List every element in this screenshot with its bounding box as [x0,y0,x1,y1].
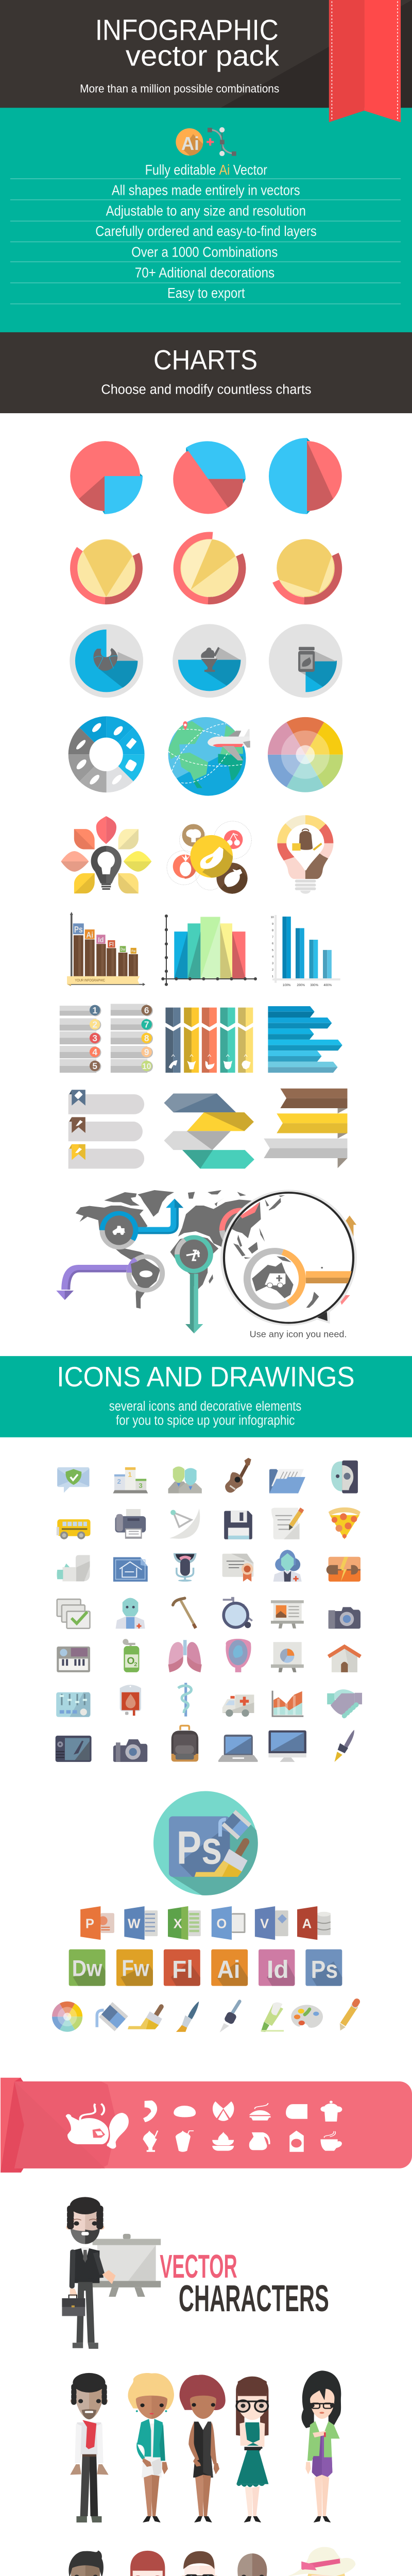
icon: technical pen [220,2002,239,2032]
panel: Photoshop badge: Ps [177,1822,222,1874]
icon: paint can [97,2002,128,2031]
bar chart with numbered axes: 6 [272,942,273,945]
icon: oxygen bottle: O [127,1655,135,1667]
numbered list left: 4 [92,1047,97,1057]
icon: Outlook [212,1906,246,1940]
character 5: woman in green jacket [302,2370,341,2522]
character 6: bearded man in vest [66,2550,111,2576]
flower with lightbulb [61,816,151,893]
icon: small colour wheel [52,2002,82,2032]
icon: podium [113,1467,148,1493]
icon: approved windows [57,1599,90,1629]
bar chart with numbered axes: 200% [297,984,305,987]
icon: lungs [168,1640,202,1672]
icon: Flash [164,1950,200,1986]
presentation board [93,2234,161,2297]
bar chart with numbered axes: 1 [272,975,273,978]
icon: handshake [327,1689,362,1716]
numbered list right: 6 [144,1005,149,1015]
icon: Word [124,1906,158,1940]
decorative arrows behind magnifier [338,1215,356,1305]
bar chart with numbered axes: 10 [270,916,274,919]
feature list: All shapes made entirely in vectors [112,182,300,198]
bar chart with numbered axes: 2 [272,969,273,972]
icon: Dreamweaver [69,1950,106,1986]
bar chart with numbered axes [270,915,340,987]
panel: world map with magnifier [56,1190,357,1333]
icon: satellite dish [169,1509,200,1539]
feature list: Carefully ordered and easy-to-find layers [95,223,317,239]
ribbon bookmark [329,0,401,122]
icon: Illustrator [211,1950,248,1986]
numbered list left: 1 [92,1005,97,1015]
bar chart with numbered axes: 3 [272,962,273,965]
icon: female doctor [273,1550,302,1582]
icon: PowerPoint: P [85,1917,94,1931]
icon: certificate [222,1554,253,1582]
title: INFOGRAPHIC [95,14,279,46]
numbered list right: 8 [144,1033,149,1043]
magnifier callout [220,1190,357,1326]
bar chart with numbered axes: 8 [272,929,273,933]
pie chart 3 [269,438,342,514]
food icon row one [143,2100,342,2122]
icon: Fireworks: Fw [122,1955,149,1981]
numbered list right [111,1004,153,1073]
heading: charts: CHARTS [153,345,258,376]
bar chart with Adobe icons: Dw [121,947,125,952]
bar chart with Adobe icons: Ps [74,924,83,935]
icon: laptop [218,1735,258,1762]
gauge chart: ice cream [173,624,246,698]
feature list: 70+ Aditional decorations [135,264,274,280]
icon: ambulance [222,1694,254,1717]
icon: baby in womb [226,1639,251,1672]
character: presenter [62,2197,115,2349]
pie chart 2 [173,441,246,514]
icon: InDesign [259,1950,295,1986]
pills with bookmarks [68,1090,144,1168]
feature list: Easy to export [167,285,245,301]
panel: infographic components [60,811,347,1168]
feature list: Fully editable Ai Vector [145,162,267,178]
bar chart with numbered axes: 9 [272,923,273,926]
pie chart 1 [70,441,143,514]
panel: icon rows and software logos [52,1639,362,2032]
bar chart with Adobe icons: YOUR INFOGRAPHIC [75,978,105,982]
icon: Dreamweaver: Dw [72,1955,102,1981]
subtitle: More than a million possible combinations [80,82,279,95]
icon: synthesizer [57,1647,90,1672]
icon: Visio: V [260,1917,269,1931]
icon: Flash: Fl [172,1956,193,1984]
numbered list right: 7 [144,1019,149,1029]
vertical tabs with animal icons [165,1008,253,1073]
panel: icons heading: ICONS AND DRAWINGS [57,1361,355,1393]
bar chart with numbered axes: 400% [323,984,332,987]
panel: food banner [1,2078,412,2349]
bar chart with numbered axes: 100% [283,984,291,987]
icon: Photoshop [305,1950,342,1986]
icon: Fireworks [116,1950,153,1986]
north america ring and arrow [102,1199,183,1247]
panel: Photoshop badge [153,1791,258,1895]
globe with plane [168,717,250,796]
column chart on dotted axis [161,914,257,986]
character 10: woman in sun hat [288,2547,355,2576]
icon: blueprint [113,1557,148,1582]
panel: header and features [0,0,412,413]
icon: podium: 3 [139,1482,143,1489]
icon: document and pencil [271,1508,302,1539]
icon: school bus [57,1519,91,1539]
numbered list right: 9 [144,1047,149,1057]
icon: camera small [113,1739,147,1762]
africa ring and arrow [177,1238,211,1333]
icon: monitor [268,1731,306,1762]
lightbulb ring chart [277,815,334,894]
icon: flat brush [128,2007,162,2029]
icon: podium: 2 [117,1478,121,1485]
world map [76,1190,261,1309]
icon: guitar [225,1458,251,1493]
donut chart 1 [74,539,139,601]
character 1: scarf [70,2373,109,2522]
numbered list left: 2 [92,1019,97,1029]
colour wheel [268,717,343,792]
icon: PowerPoint [80,1906,114,1940]
numbered list right: 10 [142,1062,151,1071]
icon: palette [291,2005,323,2028]
character 3: woman in black dress [179,2375,226,2522]
icon: Photoshop: Ps [311,1956,338,1984]
bar chart with numbered axes: 5 [272,949,273,952]
icon: pizza slice [329,1507,360,1539]
panel: food banner: VECTOR [160,2248,237,2285]
panel: round charts [68,438,343,796]
icon: rod of asclepius [178,1683,191,1717]
icon: Illustrator: Ai [217,1956,240,1984]
icon: doctors [168,1466,202,1493]
caption: Use any icon you need. [250,1329,347,1339]
panel: vector characters [66,2370,355,2576]
icon: audio mixer [56,1692,91,1717]
icon: InDesign: Id [267,1956,289,1984]
donut chart 2 [177,536,242,601]
bar chart with Adobe icons: Fw [131,948,135,953]
panel: icons heading: for you to spice up your infographic [116,1413,295,1428]
icon: Ai plus vector curve: Ai [181,133,199,154]
icon: round paintbrush [176,2002,199,2032]
wheel chart with tool icons [68,716,145,792]
bar chart with numbered axes: 4 [272,956,273,959]
interlocking arrows [164,1093,254,1168]
feature list: Over a 1000 Combinations [131,244,278,260]
south america ring and arrow [56,1257,162,1300]
icon: camera [329,1607,360,1629]
icon: Word: W [128,1917,141,1931]
bar chart with Adobe icons [67,912,145,986]
numbered list left: 5 [92,1061,97,1071]
horizontal blue arrows [268,1006,342,1073]
panel: icons section [0,1329,412,1629]
icon: folder [269,1469,305,1493]
icon: area chart [272,1691,303,1716]
icon: graphic tablet [56,1736,92,1762]
icon: Excel [168,1906,201,1940]
icon: presentation board [271,1600,304,1629]
title: vector pack [126,40,280,72]
Australia ring with ambulance [247,1251,302,1307]
character 9: bald man with moustache [232,2553,272,2576]
icon: blood bag [120,1685,141,1716]
title [95,14,280,72]
icon: thumb up cast [57,1555,90,1581]
panel: icons heading [0,1356,412,1437]
bar chart with numbered axes: 300% [310,984,319,987]
icon: backpack [171,1725,198,1761]
panel: icons heading: several icons and decorative elements [109,1399,301,1414]
icon: podium: 1 [128,1470,132,1478]
bar chart with Adobe icons: Id [98,936,104,944]
icon: presentation pie chart [271,1642,304,1672]
icon: Access: A [302,1917,312,1931]
icon: male doctor [115,1598,145,1629]
character 7: red-haired woman [130,2551,171,2576]
bar chart with Adobe icons: Ai [86,931,93,940]
feature list [10,162,401,304]
text: charts subtitle: Choose and modify countless charts [101,382,312,397]
icon: Visio [255,1906,288,1940]
fruit bubble chart [167,821,251,894]
icon: pencil [340,2002,357,2030]
icon: Outlook: O [216,1917,227,1931]
bar chart with Adobe icons: Fl [109,941,114,948]
icon: plug [327,1557,360,1582]
icon: walking cane [173,1598,196,1628]
numbered list left: 3 [92,1033,97,1043]
icon: Access [297,1906,331,1940]
numbered list left [60,1005,101,1073]
icon: house [329,1646,360,1672]
feature list: Adjustable to any size and resolution [106,202,306,218]
character 2: blonde woman in teal jacket [128,2373,174,2522]
gauge chart: jam jar [269,624,342,698]
icon: secure mail [57,1467,89,1493]
icon: oxygen bottle [123,1639,139,1672]
icon: Excel: X [174,1917,182,1931]
icon: fountain pen [334,1730,354,1762]
icon: microphone [174,1553,197,1582]
icon: wheelchair [223,1598,252,1628]
food icon row two [143,2131,342,2152]
asia ring with pink arc [222,1210,245,1241]
icon: Ai plus vector curve [176,127,236,156]
character 4: woman in green dress and glasses [236,2377,268,2522]
icon: fax printer [115,1509,146,1539]
gauge chart: croissant [70,624,143,698]
icon: roast chicken and drumstick [66,2104,129,2149]
folded ribbons [264,1089,347,1168]
character 8: man in suit with briefcase [177,2551,229,2576]
icon: oxygen bottle: 2 [134,1662,137,1668]
icon: floppy disk [224,1511,252,1539]
bar chart with numbered axes: 7 [272,936,273,939]
icon: skull x-ray [331,1461,358,1493]
donut chart 3 [276,539,338,601]
icon: highlighter [261,2002,284,2032]
